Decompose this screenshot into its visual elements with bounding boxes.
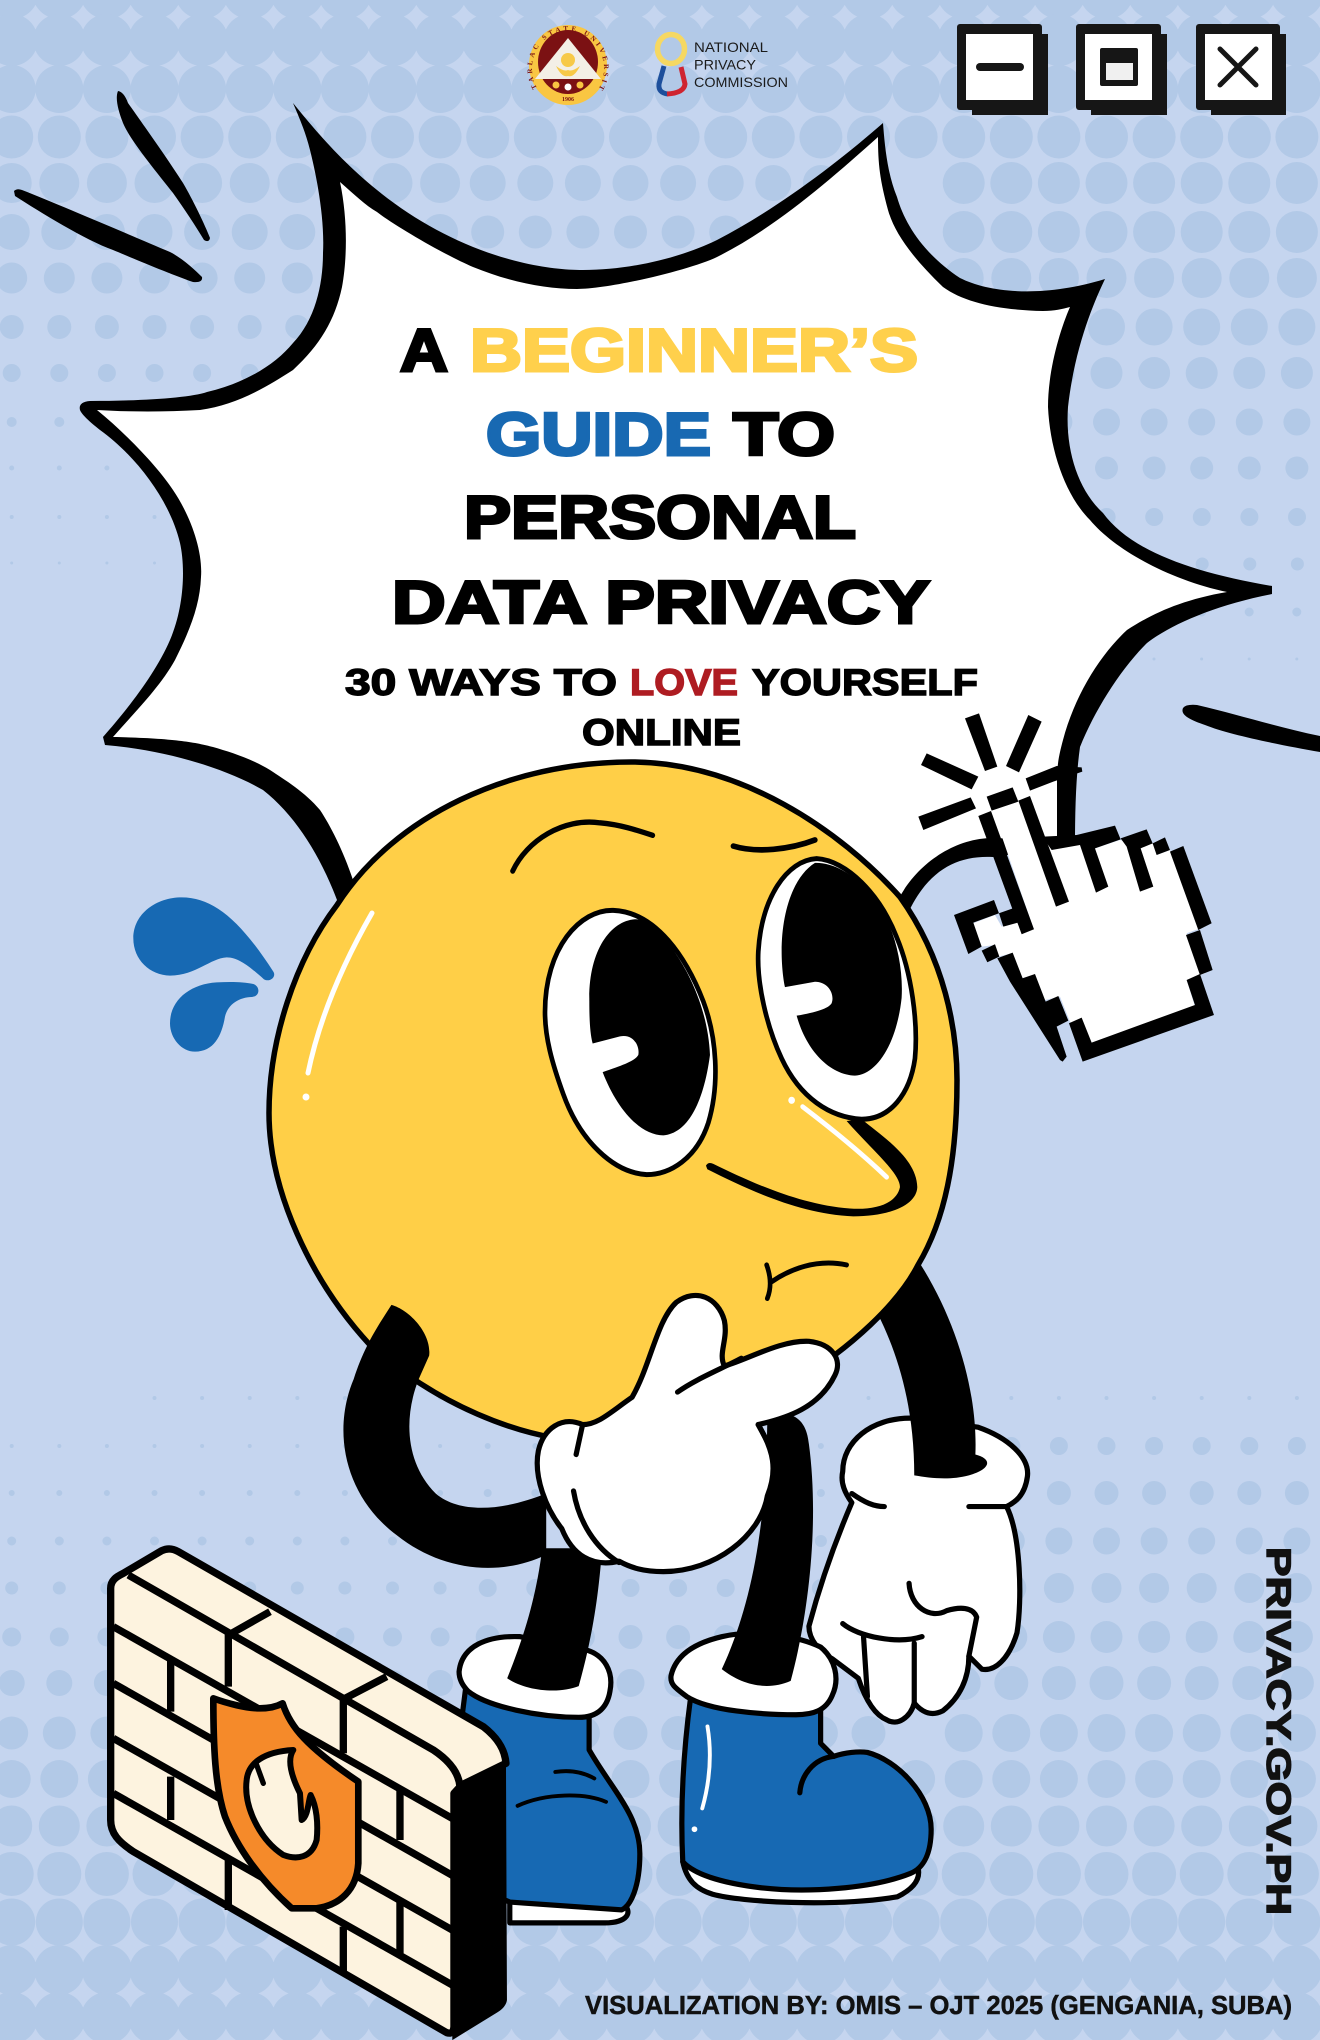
logo: National Privacy Commission: NATIONAL [694, 39, 768, 55]
icon: sweat drops [133, 897, 274, 1052]
right sock [671, 1633, 836, 1715]
head [269, 762, 957, 1442]
brick mortar lines [113, 1575, 460, 1986]
right boot [682, 1698, 931, 1903]
subtitle: YOURSELF [752, 662, 978, 703]
title: PERSONAL [464, 484, 856, 551]
burst streak marks [14, 91, 1320, 752]
character body and limbs [442, 1249, 1028, 1923]
right glove [809, 1418, 1028, 1722]
icon: minimize button [957, 24, 1048, 115]
cursor outline [954, 787, 1214, 1062]
icon: pixel hand cursor [918, 713, 1214, 1062]
subtitle: 30 WAYS TO [345, 662, 617, 703]
credit line: VISUALIZATION BY: OMIS – OJT 2025 (GENGANIA, SUBA) [585, 1990, 1292, 2020]
title: A [400, 317, 448, 384]
nose [706, 1097, 917, 1216]
wall face [111, 1549, 506, 2033]
left glove [537, 1295, 837, 1572]
eyebrows [513, 822, 815, 871]
icon: orange shield [213, 1698, 358, 1908]
left eye [545, 910, 715, 1175]
firewall brick wall [111, 1549, 506, 2038]
title: DATA PRIVACY [392, 569, 930, 636]
left arm and glove [343, 1295, 837, 1572]
left leg [507, 1548, 602, 1690]
left arm [343, 1305, 546, 1568]
title: TO [733, 401, 835, 468]
right eye [758, 859, 916, 1119]
title: BEGINNER’S [470, 317, 918, 384]
logo: National Privacy Commission [658, 34, 788, 94]
icon: close button [1196, 24, 1286, 115]
subtitle: ONLINE [582, 712, 741, 753]
title: GUIDE [486, 401, 711, 468]
speech bubble [80, 103, 1272, 960]
icon: maximize button [1076, 24, 1167, 115]
subtitle [345, 662, 978, 753]
logo: Tarlac State University seal [528, 25, 609, 105]
window buttons [957, 24, 1286, 115]
left sock [459, 1637, 611, 1717]
right leg [722, 1412, 813, 1686]
face [513, 822, 917, 1299]
cursor click ticks [918, 713, 1082, 830]
wall side [453, 1760, 506, 2038]
logo: National Privacy Commission: PRIVACY [694, 56, 757, 72]
head highlight [302, 913, 372, 1100]
vertical url text: PRIVACY.GOV.PH [1259, 1547, 1297, 1915]
cursor white fill [973, 802, 1205, 1043]
subtitle: LOVE [630, 662, 738, 703]
title [392, 317, 930, 636]
logo: Tarlac State University seal: 1906 [562, 97, 574, 103]
left boot [442, 1689, 640, 1923]
logo: National Privacy Commission: COMMISSION [694, 74, 788, 90]
mouth [767, 1263, 847, 1299]
right arm [878, 1249, 987, 1478]
